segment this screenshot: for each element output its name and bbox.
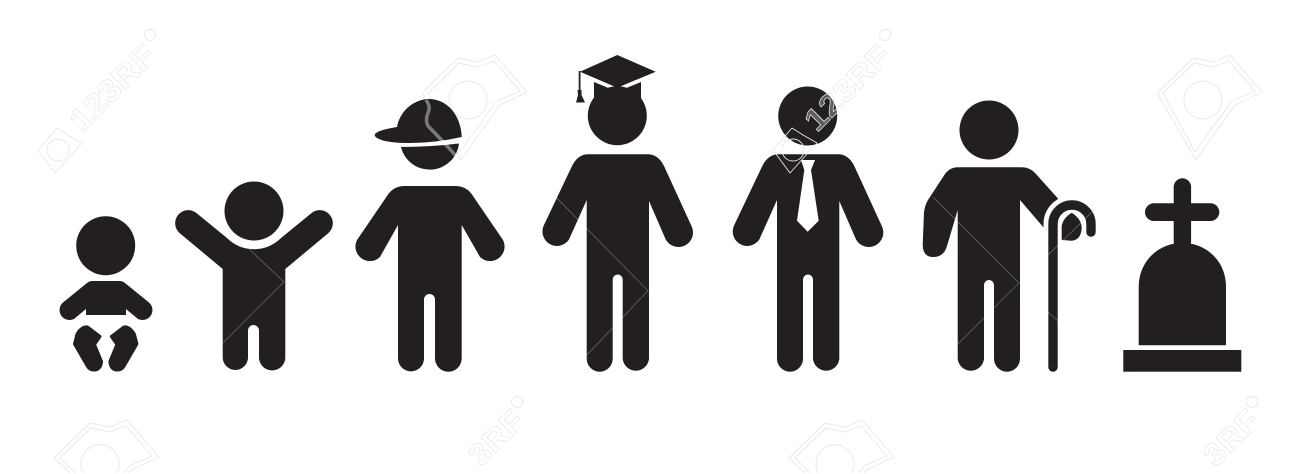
icon: child with raised arms [175,182,333,370]
watermark: band crossing the cap [426,100,457,157]
icon: elderly man with cane [923,100,1091,372]
watermark: 123RF stamps: 123RF [797,38,898,138]
icon: businessman with tie [733,86,883,372]
watermark: large logo outline behind the cap [422,55,527,160]
watermark: 123RF stamps: 3RF [461,403,531,473]
icon: gravestone with cross [1123,178,1241,372]
icon: graduate with mortarboard [542,55,693,372]
watermark: 123RF stamps: 123RF [62,38,163,138]
watermark: thin crossing lines over figures [223,197,1092,355]
icon: baby [60,216,152,370]
icon: teenager with cap [355,99,505,372]
watermark: 123RF stamps: 3RF [1196,403,1266,473]
watermark: small logo outlines [38,30,1258,408]
